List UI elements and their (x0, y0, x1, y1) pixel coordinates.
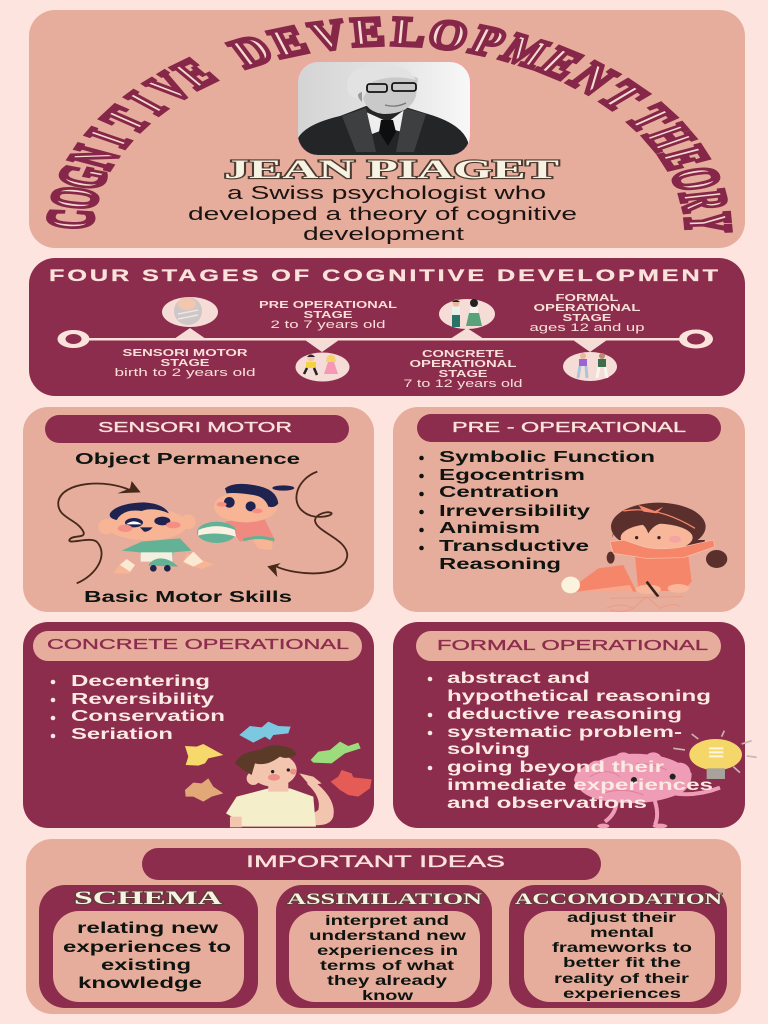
bullet list: concrete concepts: Reversibility (71, 691, 214, 708)
title: curved Cognitive Development Theory: T (89, 100, 164, 140)
title: curved Cognitive Development Theory: R (666, 187, 742, 214)
card: accomodation: adjust their (567, 909, 677, 925)
arrow: right swirl (267, 472, 347, 577)
label: pre operational stage: 2 to 7 years old (270, 319, 386, 331)
title: curved Cognitive Development Theory: O (36, 183, 113, 212)
card: assimilation: terms of what (320, 957, 454, 973)
card: schema (39, 885, 258, 1008)
card: accomodation: reality of their (554, 970, 690, 986)
icon: concrete stage children (439, 299, 495, 339)
description text: developed a theory of cognitive (188, 204, 577, 224)
bullet list: pre-operational concepts: Irreversibility (439, 503, 590, 520)
heading pill: sensori motor: SENSORI MOTOR (98, 419, 292, 436)
label: formal operational stage: ages 12 and up (530, 322, 644, 334)
description text: a Swiss psychologist who (227, 183, 546, 203)
bullet list: formal concepts: solving (447, 741, 530, 758)
panel: header (29, 8, 745, 248)
text: basic motor skills: Basic Motor Skills (84, 589, 292, 606)
panel: pre-operational (393, 407, 745, 612)
label: pre operational stage: STAGE (304, 310, 353, 321)
card: assimilation (276, 885, 492, 1008)
title: curved Cognitive Development Theory (33, 8, 745, 234)
bullet list: formal concepts: deductive reasoning (447, 706, 682, 723)
title: curved Cognitive Development Theory: T (585, 73, 659, 119)
card: schema: existing (101, 957, 191, 974)
panel: formal operational (393, 622, 757, 828)
label: formal operational stage (530, 293, 644, 334)
bullet list: pre-operational concepts: Reasoning (439, 556, 561, 573)
panel: four stages timeline (29, 258, 745, 396)
title: curved Cognitive Development Theory: M (492, 26, 557, 77)
bullet list: concrete concepts: Seriation (71, 726, 173, 743)
title: curved Cognitive Development Theory: T (613, 98, 687, 139)
panel: sensori motor (23, 407, 374, 612)
heading pill: important ideas (142, 848, 601, 880)
card: accomodation (509, 885, 727, 1008)
title: curved Cognitive Development Theory: V (133, 64, 205, 110)
bullet list: formal concepts: immediate experiences (447, 777, 713, 794)
heading: four stages: FOUR STAGES OF COGNITIVE DEVELOPMENT (49, 266, 721, 285)
card: assimilation: know (362, 987, 413, 1003)
label: concrete operational stage: OPERATIONAL (410, 359, 516, 370)
panel: concrete operational (23, 622, 374, 828)
heading pill: concrete operational (33, 631, 362, 661)
title: curved Cognitive Development Theory: E (262, 17, 315, 66)
bullet list: concrete concepts: Conservation (71, 708, 225, 725)
arrow: left swirl (58, 481, 141, 583)
bullet list: pre-operational concepts: Transductive (439, 538, 589, 555)
label: formal operational stage: STAGE (562, 313, 612, 324)
title: curved Cognitive Development Theory: C (33, 207, 107, 231)
label: sensori motor stage: STAGE (160, 358, 210, 369)
label: concrete operational stage: 7 to 12 years old (404, 378, 522, 390)
icon: preoperational children (296, 340, 350, 382)
bullet list: concrete concepts: Decentering (71, 673, 210, 690)
title: curved Cognitive Development Theory: H (630, 118, 707, 157)
title: curved Cognitive Development Theory: E (349, 8, 386, 55)
bullet list: formal concepts: systematic problem- (447, 724, 682, 741)
title: curved Cognitive Development Theory: P (463, 17, 513, 66)
name: Jean Piaget: JEAN PIAGET (224, 155, 559, 184)
label: formal operational stage: FORMAL (556, 293, 618, 304)
card: schema: knowledge (78, 975, 202, 992)
title: curved Cognitive Development Theory: O (423, 10, 473, 59)
portrait photo (297, 61, 471, 156)
card: accomodation: better fit the (563, 954, 681, 970)
description text: development (303, 224, 464, 244)
bullet list: formal concepts: going beyond their (447, 759, 664, 776)
bullet list: pre-operational concepts (419, 449, 655, 573)
card: assimilation: interpret and (325, 912, 449, 928)
title: curved Cognitive Development Theory: D (220, 26, 282, 76)
label: pre operational stage: PRE OPERATIONAL (259, 300, 397, 311)
label: sensori motor stage (114, 348, 256, 379)
timeline line with end rings (58, 330, 713, 348)
heading pill: pre-operational: PRE - OPERATIONAL (452, 419, 686, 436)
heading pill: important ideas: IMPORTANT IDEAS (246, 853, 505, 871)
heading pill: pre-operational (417, 414, 721, 442)
heading pill: concrete operational: CONCRETE OPERATIONAL (47, 636, 349, 653)
bullet list: formal concepts: abstract and (447, 670, 590, 687)
label: sensori motor stage: SENSORI MOTOR (122, 348, 249, 359)
title: curved Cognitive Development Theory: O (657, 162, 736, 195)
label: pre operational stage (259, 300, 397, 331)
card: accomodation: ACCOMODATION (515, 891, 722, 908)
card: schema: experiences to (63, 939, 231, 956)
illustration: brain with light bulb (574, 731, 757, 828)
bullet list: formal concepts: hypothetical reasoning (447, 688, 711, 705)
card: accomodation: mental (590, 924, 654, 940)
card: accomodation: experiences (563, 985, 681, 1001)
bullet list: pre-operational concepts: Animism (439, 520, 540, 537)
title: curved Cognitive Development Theory: I (115, 85, 179, 122)
title: curved Cognitive Development Theory: L (390, 8, 427, 55)
card: assimilation: experiences in (317, 942, 458, 958)
description text (188, 183, 577, 244)
title: curved Cognitive Development Theory: Y (672, 211, 745, 234)
title: curved Cognitive Development Theory: G (44, 161, 122, 194)
title: curved Cognitive Development Theory: V (304, 11, 352, 60)
label: concrete operational stage: STAGE (438, 369, 488, 380)
card: assimilation: they already (327, 972, 447, 988)
illustration: girl drawing (561, 503, 727, 611)
card: schema: relating new (77, 920, 219, 937)
heading pill: sensori motor (45, 415, 349, 443)
icon: baby stage (162, 297, 218, 339)
label: concrete operational stage: CONCRETE (422, 349, 504, 360)
bullet list: formal concepts: and observations (447, 795, 647, 812)
card: schema: SCHEMA (74, 888, 222, 909)
bullet list: concrete concepts (51, 673, 225, 743)
illustration: baby girl with ball (197, 484, 294, 550)
label: concrete operational stage (404, 349, 522, 390)
bullet list: pre-operational concepts: Centration (439, 484, 559, 501)
text: object permanence: Object Permanence (75, 451, 301, 468)
illustration: baby boy with toy car (98, 502, 213, 573)
panel: important ideas (26, 839, 741, 1014)
bullet list: formal concepts (428, 670, 713, 812)
label: formal operational stage: OPERATIONAL (534, 303, 640, 314)
title: curved Cognitive Development Theory: E (528, 39, 593, 88)
title: curved Cognitive Development Theory: E (646, 141, 723, 175)
card: accomodation: frameworks to (552, 939, 692, 955)
illustration: boy thinking with puzzle pieces (185, 722, 372, 827)
icon: formal stage teens (563, 340, 617, 381)
heading pill: formal operational: FORMAL OPERATIONAL (437, 637, 708, 654)
title: curved Cognitive Development Theory: N (557, 55, 628, 103)
title: curved Cognitive Development Theory: E (161, 50, 227, 97)
card: assimilation: understand new (309, 927, 466, 943)
bullet list: pre-operational concepts: Egocentrism (439, 467, 585, 484)
title: curved Cognitive Development Theory: I (73, 123, 144, 153)
heading pill: formal operational (416, 631, 721, 661)
card: assimilation: ASSIMILATION (287, 891, 482, 908)
label: sensori motor stage: birth to 2 years old (114, 367, 256, 379)
bullet list: pre-operational concepts: Symbolic Function (439, 449, 655, 466)
title: curved Cognitive Development Theory: N (56, 140, 133, 174)
